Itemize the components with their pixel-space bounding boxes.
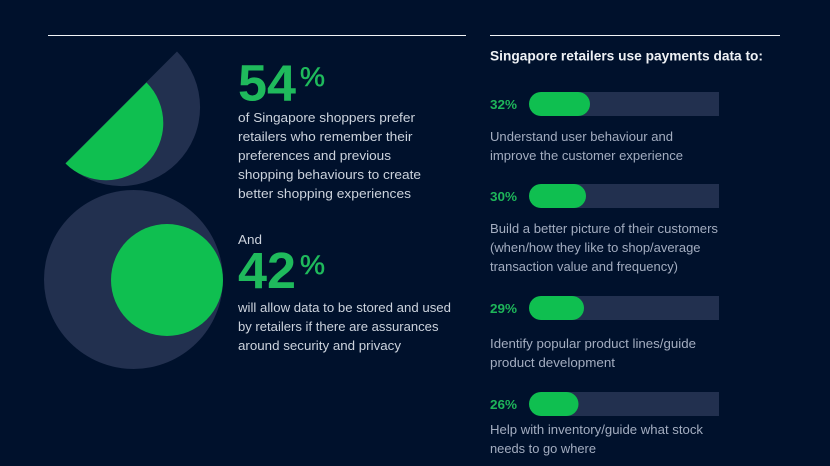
stat: 54 percent xyxy=(238,54,325,112)
item: 32 percent xyxy=(490,92,719,163)
text block: shopper preference: shopping behaviours to create xyxy=(238,167,421,182)
item: 29 percent: product development xyxy=(490,355,615,370)
item: 32 percent: Understand user behaviour and xyxy=(490,129,673,144)
text block: data storage xyxy=(237,300,451,353)
item: 26 percent: 26% xyxy=(490,397,517,412)
item: 26 percent: Help with inventory/guide what stock xyxy=(490,422,703,437)
text block: shopper preference xyxy=(238,110,421,201)
text block: shopper preference: preferences and previous xyxy=(238,148,392,163)
text block: shopper preference: retailers who remember their xyxy=(238,129,413,144)
item: 30 percent: (when/how they like to shop/average xyxy=(490,240,700,255)
icon: half circles xyxy=(66,52,200,186)
item: 30 percent: Build a better picture of their customers xyxy=(490,221,718,236)
item: 29 percent: 29% xyxy=(490,301,517,316)
item: 30 percent: 30% xyxy=(490,189,517,204)
item: 32 percent: improve the customer experience xyxy=(490,148,683,163)
text block: shopper preference: of Singapore shoppers prefer xyxy=(238,110,416,125)
item: 30 percent xyxy=(490,184,719,274)
text block: data storage: around security and privacy xyxy=(238,338,401,353)
item: 29 percent: Identify popular product lines/guide xyxy=(490,336,696,351)
stat: 42 percent: 42 xyxy=(238,242,296,299)
icon: nested circles xyxy=(44,190,223,369)
stat: 54 percent: 54 xyxy=(238,54,297,112)
item: 26 percent: needs to go where xyxy=(490,441,596,456)
heading: retailers: Singapore retailers use payments data to: xyxy=(490,48,763,64)
text block: data storage: will allow data to be stored and used xyxy=(237,300,451,315)
item: 30 percent: transaction value and frequency) xyxy=(490,259,678,274)
stat: 54 percent: % xyxy=(300,62,325,92)
text block: data storage: by retailers if there are assurances xyxy=(238,319,439,334)
item: 26 percent xyxy=(490,392,719,456)
text: And: And xyxy=(238,232,262,247)
item: 32 percent: 32% xyxy=(490,97,517,112)
stat: 42 percent: % xyxy=(300,250,325,280)
text block: shopper preference: better shopping experiences xyxy=(238,186,412,201)
item: 29 percent xyxy=(490,296,719,370)
stat: 42 percent xyxy=(238,242,325,299)
